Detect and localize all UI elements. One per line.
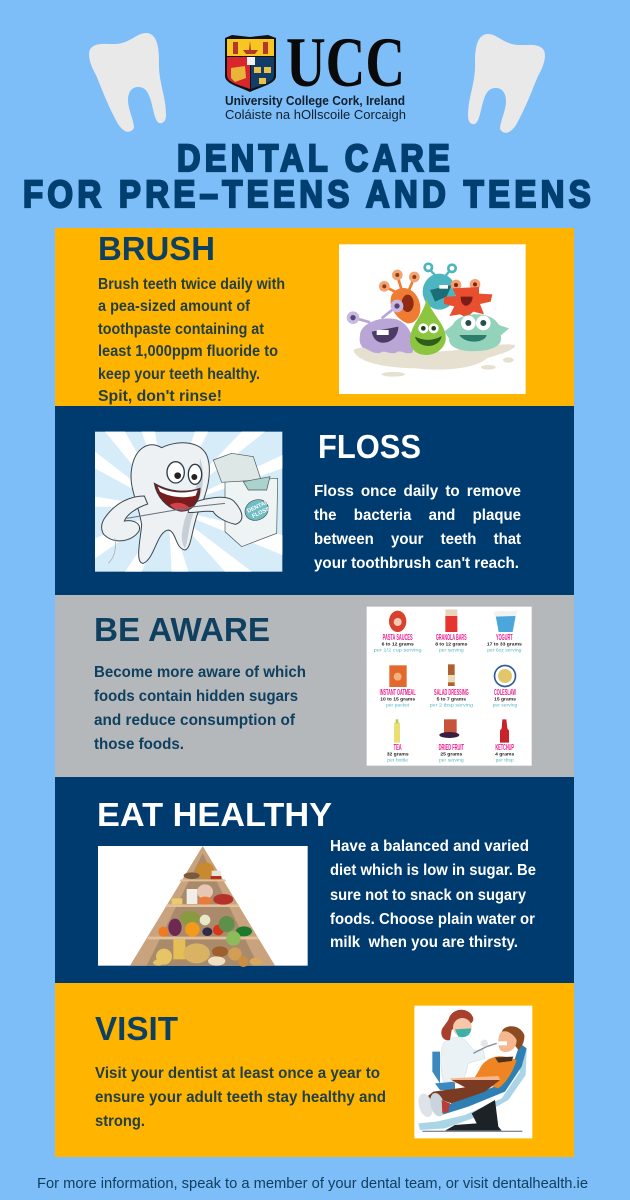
chart: hidden sugars in foods: KETCHUP bbox=[495, 743, 514, 752]
text: brush advice: Brush teeth twice daily with bbox=[98, 276, 285, 293]
text: eat healthy advice: diet which is low in sugar. Be bbox=[330, 862, 536, 879]
row 3 labels: TEA bbox=[394, 743, 402, 752]
teal germ bbox=[423, 262, 457, 310]
mint germ bbox=[444, 314, 509, 351]
row 3 labels: 25 grams bbox=[440, 752, 463, 758]
text: brush advice: keep your teeth healthy. bbox=[98, 366, 260, 383]
panel: visit bbox=[55, 983, 574, 1157]
icon: left tooth bbox=[89, 33, 166, 132]
UCC wordmark: UCC bbox=[286, 24, 405, 102]
panel: be aware bbox=[55, 595, 574, 777]
third shelf food bbox=[158, 911, 252, 946]
row 3 labels: per tbsp bbox=[496, 758, 514, 764]
row 1 labels: per serving bbox=[439, 648, 464, 654]
orange germ bbox=[379, 270, 420, 323]
text: be aware advice: those foods. bbox=[94, 736, 184, 753]
dentist bbox=[441, 1010, 485, 1082]
row 1 labels: 6 to 12 grams bbox=[382, 642, 414, 648]
purple germ bbox=[347, 300, 414, 353]
illustration: tooth flossing: DENTAL bbox=[246, 500, 270, 515]
heading: floss: FLOSS bbox=[318, 428, 421, 465]
row 2 labels: 15 grams bbox=[494, 697, 516, 703]
patient bbox=[416, 1026, 524, 1119]
panel: floss bbox=[55, 406, 574, 595]
text: floss advice bbox=[314, 483, 522, 572]
text: be aware advice: and reduce consumption of bbox=[94, 712, 296, 729]
food icons bbox=[389, 609, 517, 743]
green germ bbox=[410, 298, 446, 355]
row 3 labels: per bottle bbox=[387, 758, 408, 764]
text: be aware advice: Become more aware of which bbox=[94, 664, 306, 681]
row 3 labels: DRIED FRUIT bbox=[439, 743, 464, 752]
title bbox=[23, 138, 595, 216]
row 3 labels: 32 grams bbox=[387, 752, 409, 758]
title: DENTAL CARE bbox=[177, 138, 454, 180]
heading: be aware: BE AWARE bbox=[94, 611, 270, 648]
text: floss advice: Floss once daily to remove bbox=[314, 483, 521, 500]
row 2 labels: per serving bbox=[493, 703, 518, 709]
tooth character bbox=[131, 443, 209, 563]
text: visit advice: ensure your adult teeth stay healthy and bbox=[95, 1089, 386, 1106]
row 3 labels bbox=[387, 743, 514, 764]
illustration: tooth flossing bbox=[95, 432, 282, 572]
text: floss advice: between your teeth that bbox=[314, 531, 522, 548]
row 2 labels: 10 to 15 grams bbox=[380, 697, 415, 703]
footer text: For more information, speak to a member of your dental team, or visit dentalhealth.ie bbox=[37, 1175, 588, 1192]
text: floss advice: the bacteria and plaque bbox=[314, 507, 521, 524]
row 1 labels: YOGURT bbox=[496, 633, 513, 642]
row 1 labels: 17 to 33 grams bbox=[487, 642, 522, 648]
second shelf food bbox=[172, 884, 233, 905]
row 2 labels bbox=[380, 688, 518, 709]
text: brush advice: least 1,000ppm fluoride to bbox=[98, 343, 278, 360]
row 2 labels: 5 to 7 grams bbox=[437, 697, 466, 703]
text: brush advice bbox=[98, 276, 285, 405]
row 2 labels: per 2 tbsp serving bbox=[430, 703, 473, 709]
illustration: tooth flossing: FLOSS bbox=[251, 506, 271, 520]
icon: UCC crest bbox=[225, 35, 276, 92]
row 3 labels: 4 grams bbox=[495, 752, 514, 758]
text: be aware advice bbox=[94, 664, 306, 753]
row 1 labels: per 1/2 cup serving bbox=[374, 648, 422, 654]
illustration: dentist and patient bbox=[414, 1006, 532, 1138]
panel: brush bbox=[55, 228, 574, 406]
text: eat healthy advice: sure not to snack on sugary bbox=[330, 887, 526, 904]
row 1 labels: 8 to 12 grams bbox=[435, 642, 468, 648]
row 2 labels: per packet bbox=[386, 703, 410, 709]
text: floss advice: your toothbrush can't reach. bbox=[314, 555, 519, 572]
row 1 labels bbox=[374, 633, 522, 654]
row 2 labels: SALAD DRESSING bbox=[434, 688, 469, 697]
text: visit advice: Visit your dentist at least once a year to bbox=[95, 1065, 380, 1082]
heading: visit: VISIT bbox=[95, 1010, 178, 1047]
text: eat healthy advice: foods. Choose plain water or bbox=[330, 911, 535, 928]
row 1 labels: per 6oz serving bbox=[487, 648, 522, 654]
heading: brush: BRUSH bbox=[98, 230, 215, 267]
floss box bbox=[213, 453, 278, 547]
icon: right tooth bbox=[468, 34, 545, 133]
top shelf food bbox=[184, 862, 221, 879]
text: eat healthy advice: Have a balanced and varied bbox=[330, 838, 529, 855]
university name in Irish: Coláiste na hOllscoile Corcaigh bbox=[225, 108, 406, 122]
panel: eat healthy bbox=[55, 777, 574, 983]
dental chair bbox=[418, 1043, 527, 1132]
red germ bbox=[444, 279, 492, 318]
chart: hidden sugars in foods bbox=[367, 607, 532, 766]
row 1 labels: PASTA SAUCES bbox=[383, 633, 413, 642]
illustration: cartoon germs bbox=[339, 244, 526, 394]
row 1 labels: GRANOLA BARS bbox=[436, 633, 467, 642]
row 2 labels: INSTANT OATMEAL bbox=[380, 688, 416, 697]
university name: University College Cork, Ireland bbox=[225, 94, 405, 108]
text: visit advice: strong. bbox=[95, 1113, 145, 1130]
text: brush advice: Spit, don't rinse! bbox=[98, 388, 222, 405]
text: brush advice: a pea-sized amount of bbox=[98, 298, 251, 315]
text: brush advice: toothpaste containing at bbox=[98, 321, 265, 338]
row 2 labels: COLESLAW bbox=[494, 688, 516, 697]
text: visit advice bbox=[95, 1065, 386, 1130]
bottom shelf food bbox=[153, 939, 262, 967]
text: be aware advice: foods contain hidden sugars bbox=[94, 688, 298, 705]
row 3 labels: per serving bbox=[439, 758, 464, 764]
illustration: food pyramid bbox=[98, 846, 308, 967]
UCC logo bbox=[225, 24, 406, 122]
text: eat healthy advice bbox=[330, 838, 536, 951]
text: eat healthy advice: milk when you are thirsty. bbox=[330, 934, 518, 951]
heading: eat healthy: EAT HEALTHY bbox=[97, 796, 332, 833]
